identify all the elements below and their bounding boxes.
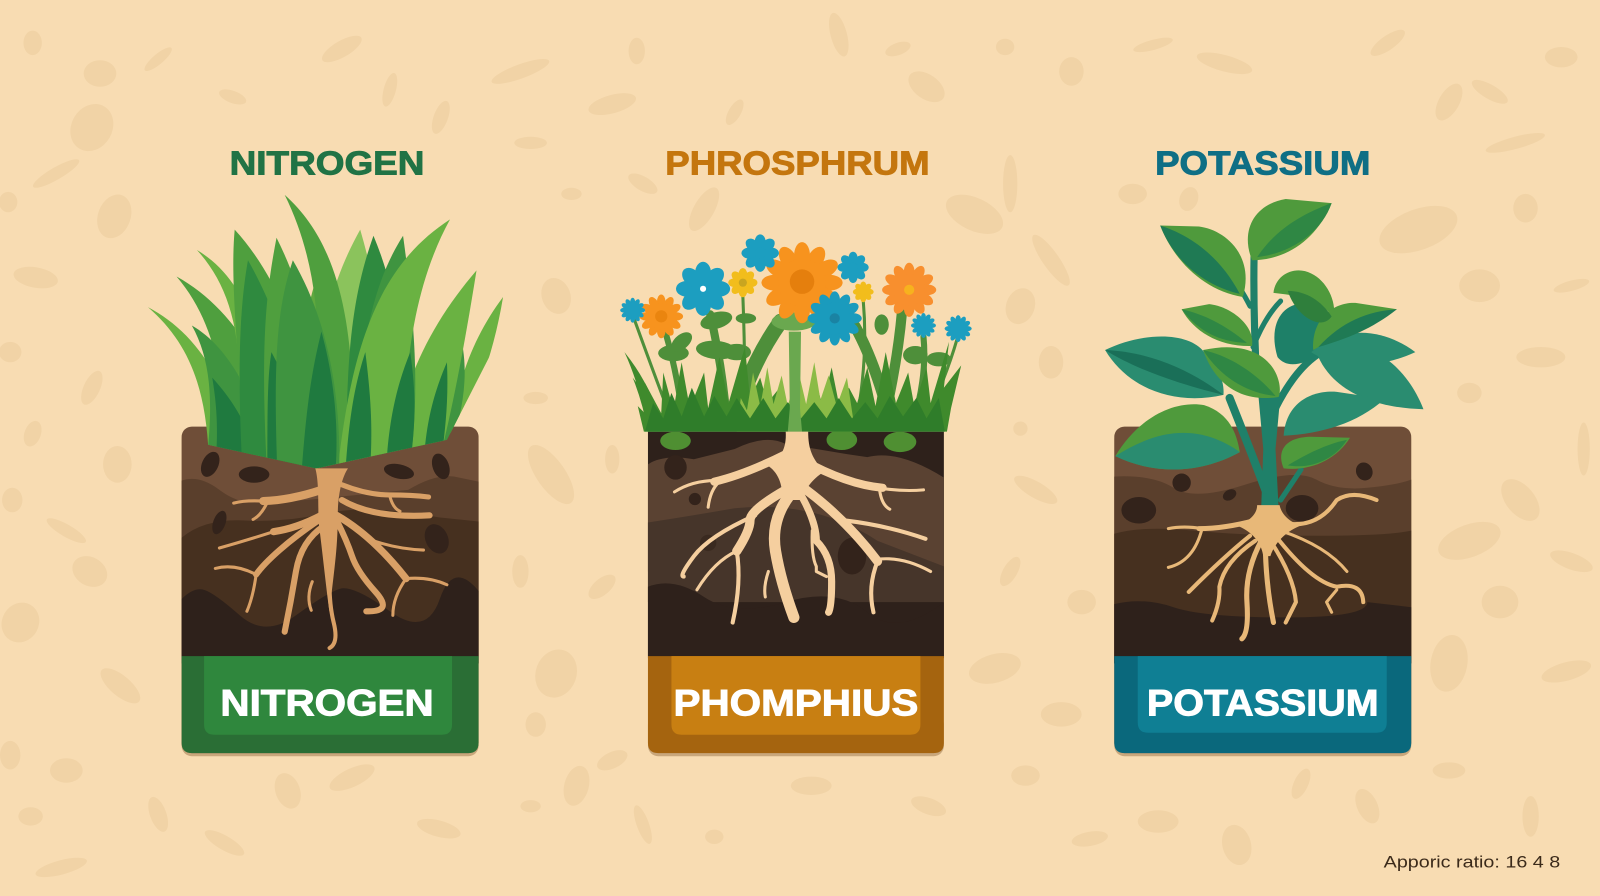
leaf: right teal	[1311, 333, 1415, 365]
panel: potassium	[1105, 146, 1423, 756]
leaf: right teal lower	[1316, 345, 1423, 409]
label: nitrogen: NITROGEN	[220, 682, 434, 723]
soil rocks: nitrogen	[197, 449, 453, 557]
leaf: lower right teal	[1284, 392, 1385, 436]
roots: nitrogen	[215, 468, 447, 648]
flower stem	[788, 332, 802, 432]
leaf: left	[1182, 304, 1252, 346]
leaf: bottom left	[1115, 404, 1240, 469]
grass tufts: phosphorus	[624, 342, 961, 432]
soil rocks: potassium	[1121, 460, 1376, 524]
footnote: Apporic ratio: 16 4 8	[1384, 852, 1560, 871]
roots: potassium	[1168, 495, 1377, 639]
leaf: bottom small	[1281, 437, 1350, 469]
panel: phosphorus	[620, 146, 972, 756]
label: potassium: POTASSIUM	[1147, 682, 1379, 723]
label: phomphius: PHOMPHIUS	[673, 682, 918, 723]
soil block: nitrogen	[182, 427, 479, 756]
leaf: top	[1248, 199, 1332, 260]
stems	[1230, 255, 1321, 507]
leaf: center green	[1203, 347, 1280, 398]
leaf: upper right curl	[1273, 270, 1334, 317]
grass	[148, 195, 503, 480]
leaf: upper left	[1160, 226, 1246, 297]
heading: potassium: POTASSIUM	[1155, 146, 1370, 183]
leaf: teal behind	[1274, 304, 1330, 364]
plant	[1105, 199, 1423, 507]
soil block: phosphorus	[648, 432, 944, 756]
heading: phosphrum: PHROSPHRUM	[665, 146, 930, 183]
leaf: right green	[1313, 303, 1397, 350]
stems and leaves	[635, 296, 957, 418]
roots: phosphorus	[674, 432, 931, 623]
leaf: large left teal	[1105, 337, 1224, 398]
soil block: potassium	[1114, 427, 1411, 756]
soil rocks: phosphorus	[660, 430, 916, 575]
heading: nitrogen: NITROGEN	[230, 146, 424, 183]
flowers	[620, 234, 972, 345]
panel: nitrogen	[148, 146, 503, 756]
